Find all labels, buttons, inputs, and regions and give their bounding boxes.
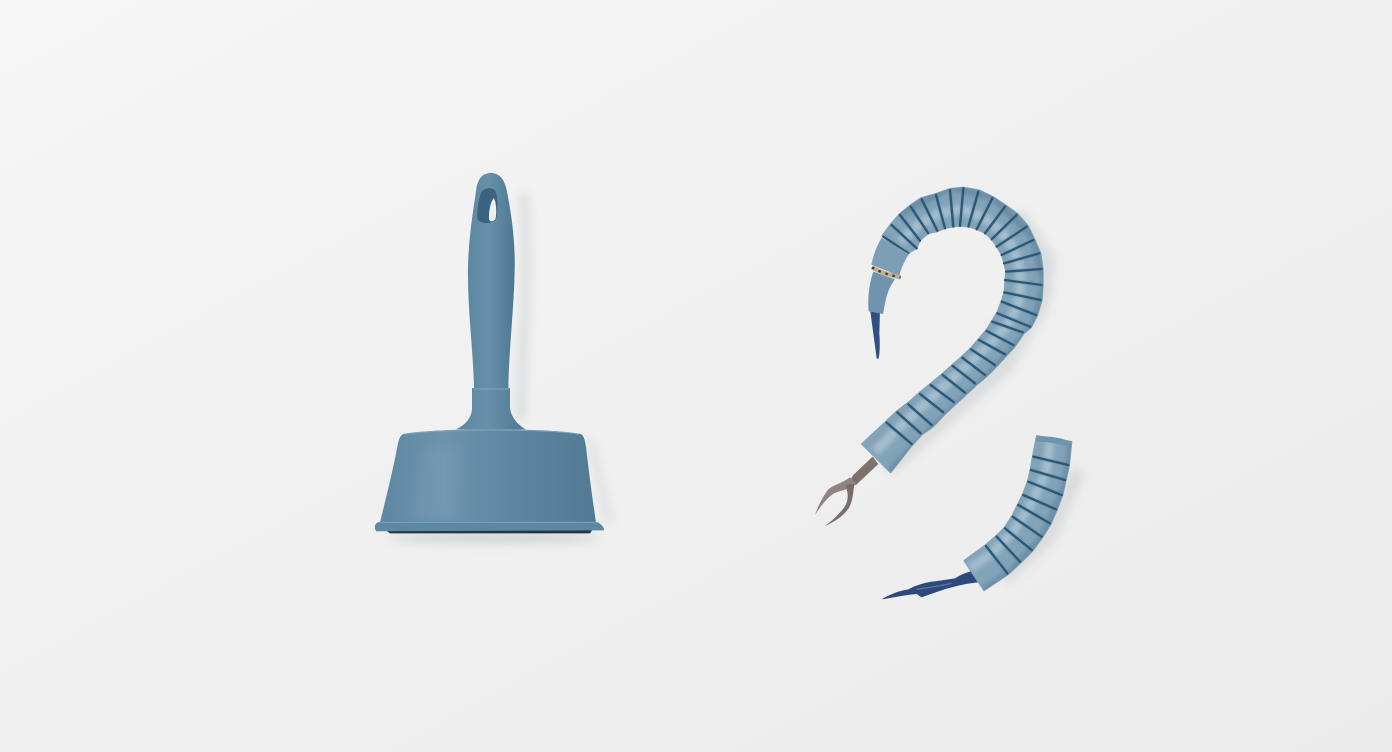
arm shadow [888,213,1047,468]
arm stripes [883,188,1042,444]
arm tip sleeve [868,272,895,314]
plunger [375,173,610,544]
plunger neck [456,388,526,429]
slot see-through opening [489,198,496,221]
illustration: plunger and flexible tools [374,172,1084,600]
handle hanging slot [477,188,497,223]
long flexible arm with claw [815,187,1047,526]
ring dark beads [872,267,901,277]
short arm groove shadows [986,457,1068,573]
plunger underside [383,528,593,533]
short arm shading [970,440,1072,590]
gold ring [872,267,901,277]
rim highlight [379,521,596,524]
arm shading [875,187,1045,472]
navy needle [870,308,880,359]
handle collar line [473,387,509,390]
plunger bell [380,429,596,523]
arm body [862,187,1045,473]
bell soft highlight [410,447,460,518]
short arm body [964,436,1072,591]
arm groove shadows [883,188,1042,444]
short flexible arm with leaf tip [882,436,1078,599]
plunger shadows [387,193,610,544]
claw upper prong [815,477,857,515]
plunger handle [468,173,515,388]
short arm shadow [1003,470,1078,578]
plunger rim [375,522,604,531]
leaf tip [882,570,982,599]
bell top edge highlight [405,430,579,434]
claw lower prong [825,484,854,526]
claw rod [849,457,878,485]
leaf tip highlight [917,583,952,589]
arm head cap [871,238,909,276]
short arm open end [1036,436,1071,447]
short arm stripes [986,457,1068,573]
